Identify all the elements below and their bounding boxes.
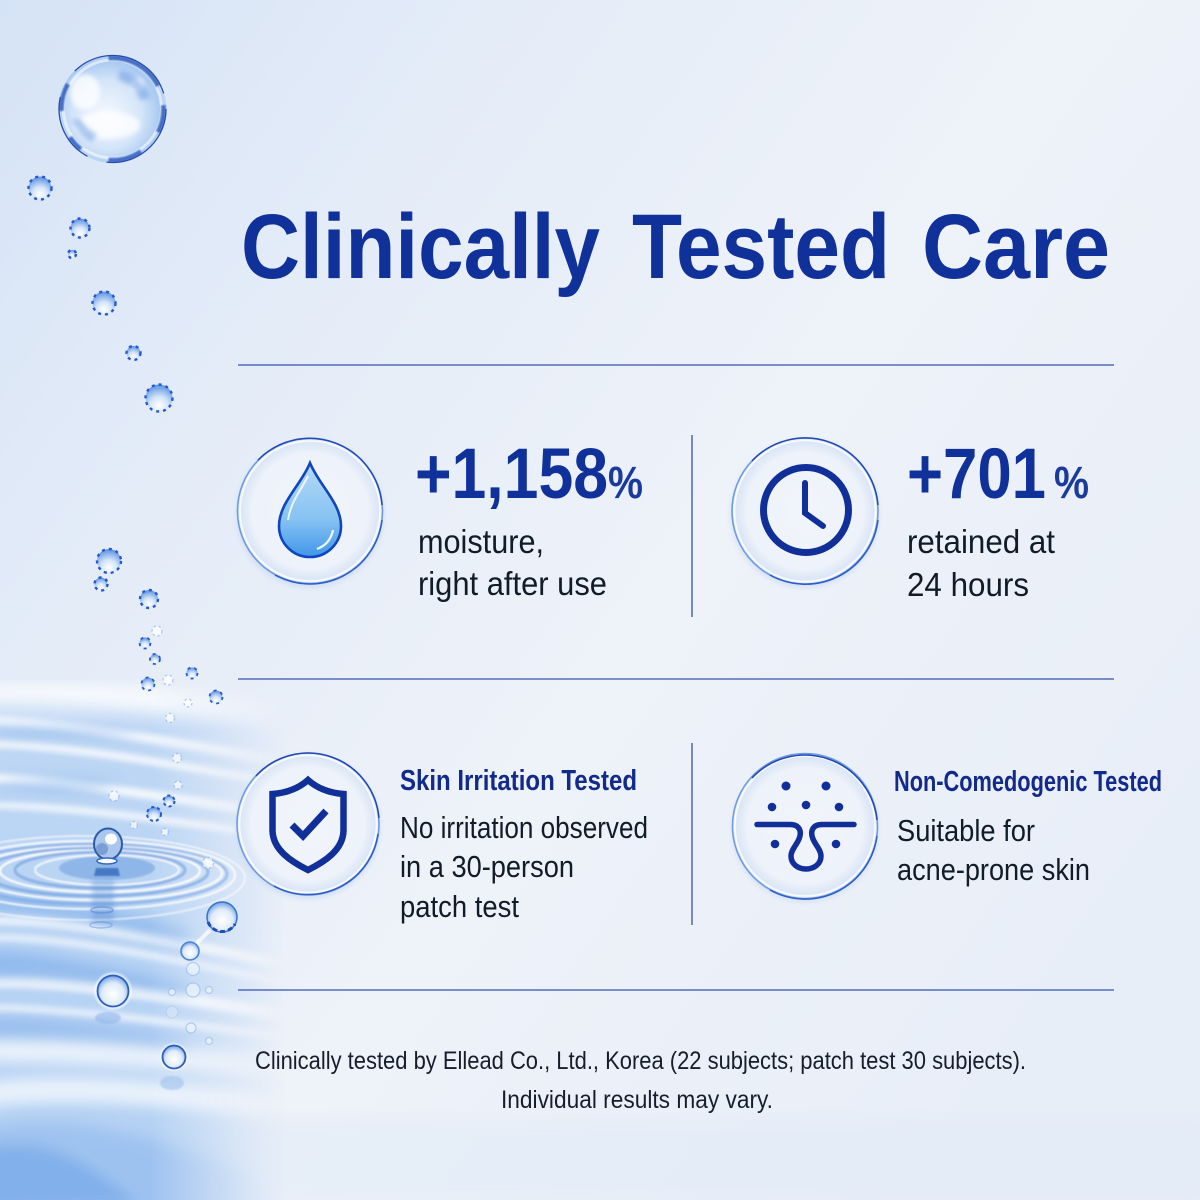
description xyxy=(897,813,1090,887)
stat description xyxy=(418,523,607,602)
stat description xyxy=(907,523,1055,603)
description: Suitable for xyxy=(897,813,1035,848)
title: Care xyxy=(922,196,1110,298)
panel: retention stat xyxy=(731,435,1089,603)
icon: pore and dots in glass circle xyxy=(732,754,878,902)
icon: shield with check in glass circle xyxy=(236,753,380,899)
lower droplets with reflections xyxy=(94,902,237,1090)
description: No irritation observed xyxy=(400,810,648,845)
footnote xyxy=(255,1047,1026,1114)
stat description: 24 hours xyxy=(907,566,1029,603)
stat: +701%: +701 xyxy=(907,435,1046,514)
stat description: moisture, xyxy=(418,523,544,560)
footnote: Individual results may vary. xyxy=(501,1086,773,1114)
description: acne-prone skin xyxy=(897,852,1090,887)
stat: +1,158%: % xyxy=(608,457,643,508)
icon: water drop in glass circle xyxy=(236,438,384,588)
water droplet rising from ripple xyxy=(90,828,122,928)
heading: Skin Irritation Tested: Skin Irritation Tested xyxy=(400,765,637,797)
divider: top row vertical xyxy=(691,435,693,617)
panel: moisture stat xyxy=(236,435,643,602)
panel: skin irritation xyxy=(236,753,648,924)
icon: clock in glass circle xyxy=(731,438,879,588)
title: Tested xyxy=(632,196,890,298)
footnote: Clinically tested by Ellead Co., Ltd., Korea (22 subjects; patch test 30 subjects). xyxy=(255,1047,1026,1075)
stat description: retained at xyxy=(907,523,1055,560)
title xyxy=(241,196,1110,298)
description: in a 30-person xyxy=(400,849,574,884)
lower-right soft wash xyxy=(260,1120,1200,1200)
divider: bottom row vertical xyxy=(691,743,693,925)
ripple rings xyxy=(0,836,245,920)
stat description: right after use xyxy=(418,565,607,602)
description: patch test xyxy=(400,889,519,924)
divider: above footnote xyxy=(238,989,1114,991)
stat: +701%: % xyxy=(1054,457,1089,508)
panel: non-comedogenic xyxy=(732,754,1162,902)
divider: under title xyxy=(238,364,1114,366)
water surface with ripples xyxy=(0,683,268,1200)
title: Clinically xyxy=(241,196,600,298)
description xyxy=(400,810,648,924)
large bubble xyxy=(58,55,166,163)
water droplets, upper stream xyxy=(28,55,222,868)
divider: between rows xyxy=(238,678,1114,680)
stat: +1,158%: +1,158 xyxy=(415,435,608,514)
